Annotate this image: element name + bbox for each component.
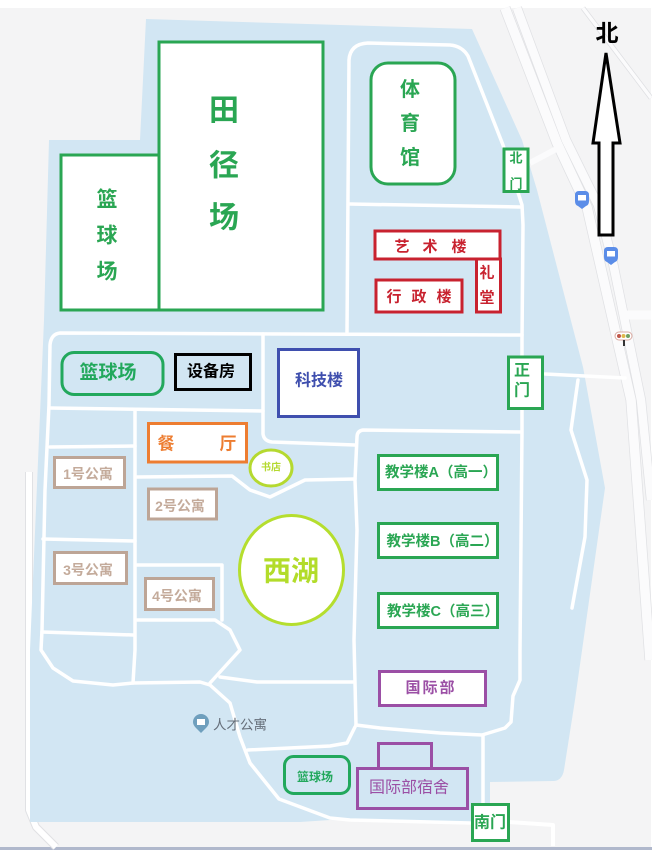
international department: 国际部 (405, 678, 457, 696)
teaching building C (378, 594, 499, 628)
international department (380, 672, 486, 706)
teaching building C: 教学楼C（高三） (387, 602, 499, 620)
icon: bus stop 2 (604, 247, 618, 265)
west lake (240, 516, 344, 624)
basketball court south: 篮球场 (297, 769, 333, 784)
administration building: 政 (411, 288, 427, 306)
main gate: 正 (514, 362, 530, 380)
teaching building B: 教学楼B（高二） (387, 532, 498, 550)
canteen (148, 424, 246, 462)
gymnasium: 体 (400, 78, 420, 101)
track field: 田 (209, 94, 239, 128)
science building (278, 350, 358, 416)
basketball court north: 篮 (96, 188, 118, 212)
auditorium: 礼 (479, 264, 495, 282)
science building: 科技楼 (295, 370, 343, 390)
bookstore (250, 450, 292, 486)
north gate: 北 (509, 150, 523, 166)
gymnasium (371, 63, 455, 184)
basketball court north: 球 (96, 224, 118, 248)
international dormitory (358, 744, 468, 808)
apartment 1 (54, 458, 124, 488)
canteen: 餐 (158, 434, 174, 454)
art building: 艺 (394, 238, 410, 256)
talent apartment label (193, 714, 267, 733)
north gate: 门 (509, 176, 523, 192)
administration building (376, 280, 462, 312)
apartment 4: 4号公寓 (152, 588, 202, 604)
bookstore: 书店 (261, 460, 281, 474)
gymnasium: 馆 (400, 146, 420, 169)
art building: 楼 (451, 238, 467, 256)
equipment room (176, 354, 250, 390)
canteen: 厅 (220, 434, 236, 454)
south gate (472, 804, 508, 840)
administration building: 行 (386, 288, 402, 306)
main gate (508, 357, 542, 408)
talent apartment label: 人才公寓 (213, 716, 267, 732)
icon: north arrow (593, 53, 620, 235)
apartment 2: 2号公寓 (155, 498, 205, 514)
apartment 3: 3号公寓 (63, 562, 113, 578)
west lake: 西湖 (263, 556, 319, 586)
gymnasium: 育 (400, 111, 420, 135)
administration building: 楼 (436, 288, 452, 306)
auditorium (476, 259, 500, 312)
teaching building B (378, 524, 498, 558)
track field (159, 42, 323, 310)
icon: traffic light (615, 332, 632, 346)
south gate: 南门 (474, 814, 506, 832)
basketball court north (61, 155, 159, 310)
equipment room: 设备房 (187, 362, 235, 380)
north gate (504, 149, 528, 192)
art building: 术 (422, 238, 438, 256)
icon: bus stop 1 (575, 191, 589, 209)
track field: 径 (209, 150, 239, 182)
art building (375, 231, 500, 259)
main gate: 门 (514, 382, 530, 400)
apartment 2 (148, 489, 216, 519)
track field: 场 (209, 202, 239, 234)
international dormitory: 国际部宿舍 (369, 778, 449, 796)
apartment 1: 1号公寓 (63, 466, 113, 482)
teaching building A: 教学楼A（高一） (385, 463, 497, 481)
basketball court middle: 篮球场 (79, 360, 137, 384)
basketball court south (284, 756, 350, 794)
basketball court north: 场 (96, 260, 118, 284)
basketball court middle (62, 352, 163, 394)
teaching building A (378, 456, 498, 490)
apartment 3 (54, 552, 126, 584)
apartment 4 (146, 578, 214, 610)
north label: 北 (596, 20, 618, 46)
auditorium: 堂 (479, 290, 495, 306)
